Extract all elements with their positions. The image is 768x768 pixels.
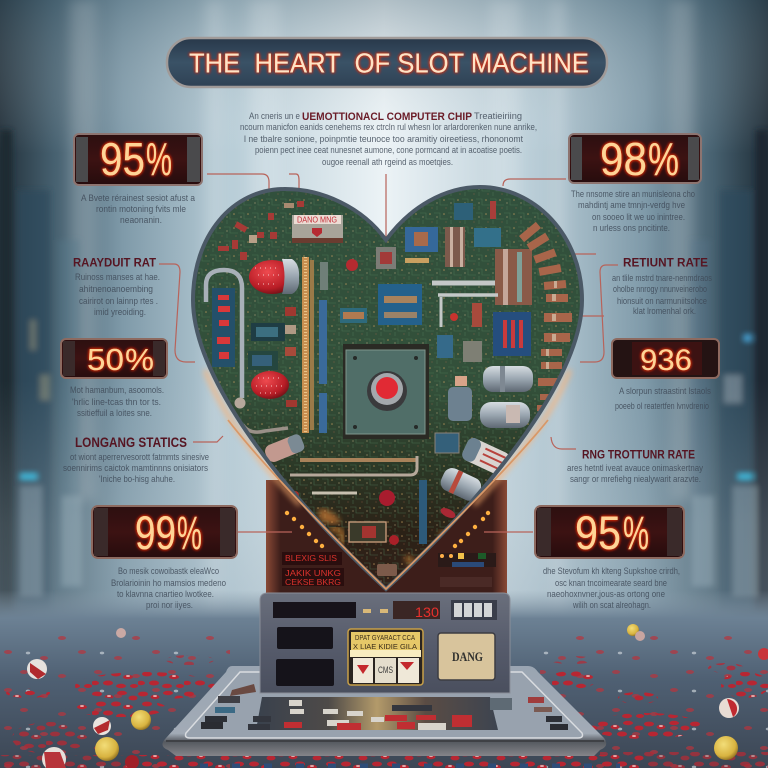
stand: left display panels	[282, 552, 344, 587]
text: payout rate: cairirot on lainnp rtes .	[79, 296, 158, 306]
stat box: 50%	[61, 339, 167, 378]
text: rng turnover rate: sangr or mrefiehg niealywarit arazvte.	[570, 474, 701, 484]
slot machine upper body	[260, 593, 510, 693]
text: return rate: hionsuit on narmuniitsohce	[617, 296, 707, 306]
caption: 99%: to klavnna cnartieo lwotkee.	[117, 589, 214, 599]
gold memory strip	[302, 257, 314, 433]
caption: 99%: proi nor iiyes.	[146, 600, 193, 610]
slot reel window	[348, 629, 423, 685]
blue memory strips	[319, 262, 328, 433]
scattered red chips on the floor	[0, 636, 768, 768]
stat box: 95% top left	[74, 133, 202, 185]
connector lines	[159, 174, 618, 532]
stat box: 99%: %	[177, 506, 202, 559]
background: server racks right	[690, 130, 768, 610]
main chip with red button	[343, 344, 429, 439]
stand: left display panels: BLEXIG SLIS	[285, 554, 337, 563]
stand lights	[285, 511, 490, 548]
dang label panel	[438, 633, 495, 680]
caption: top right: n urless ons pncitinte.	[593, 223, 670, 233]
slot reel window: CMS	[378, 665, 393, 675]
text: longang statics: ot wiont aperrervesorott fatmmts sinesive	[70, 452, 209, 462]
caption: top left: A Bvete rérainest sesiot afust a	[81, 193, 195, 203]
stat box: 99%	[92, 506, 237, 559]
intro paragraph	[240, 111, 537, 167]
caption: 936: A slorpun straastint lstaols	[619, 386, 711, 396]
heart glow	[205, 370, 570, 505]
red capsule top	[249, 259, 299, 294]
stat box: 50%: 50	[87, 342, 124, 377]
stat box: 95% lower right	[535, 506, 684, 559]
text: payout rate: imid yreoiding.	[94, 307, 146, 317]
text: rng turnover rate: ares hetntl iveat avauce onimaskertnay	[567, 463, 703, 473]
silver hook pipe	[206, 270, 246, 408]
intro paragraph: UEMOTTIONACL COMPUTER CHIP	[302, 111, 472, 123]
caption: 95% lower right: wilih on scat alreohagn.	[572, 600, 651, 610]
caption: 99%: Brolarioinin ho mamsios medeno	[111, 578, 226, 588]
chip: top label module	[292, 215, 343, 243]
caption: 50%: ssitieffuil a loites sne.	[77, 408, 152, 418]
stand behind the heart	[266, 480, 507, 598]
text: payout rate	[75, 272, 160, 317]
capacitors lower	[243, 425, 512, 504]
heading: rng turnover rate: RNG TROTTUNR RATE	[582, 448, 695, 462]
caption: 936: poeeb ol reatertfen lvnvdrenio	[615, 401, 709, 411]
caption: top right: mahdintj ame tmnjn-verdg hve	[578, 200, 685, 210]
text: return rate: oholbe nnrogy nnunveinerobo	[613, 284, 707, 294]
blue processor	[378, 284, 422, 325]
text: longang statics: soennirims caictok mamtinnns onisiators	[63, 463, 208, 473]
base: side keys right	[490, 697, 568, 730]
balls on the floor	[27, 624, 768, 768]
text: payout rate: ahitnenoanoembing	[79, 284, 153, 294]
chips along the bottom edge	[125, 755, 645, 768]
caption: top left: rontin motoning fvits mle	[96, 204, 186, 214]
floor	[0, 590, 768, 768]
base: side keys left	[201, 684, 256, 729]
slot reel window: DPAT GYARACT CCA	[355, 633, 415, 642]
stand: left display panels: JAKIK UNKG	[285, 569, 341, 578]
stat box: 98% top right	[569, 133, 701, 185]
glowing solder points	[318, 509, 448, 572]
stat box: 95% lower right: %	[623, 506, 649, 559]
stat box: 50%: %	[125, 342, 154, 377]
digital counter: 130	[415, 604, 439, 620]
caption: 936	[615, 386, 711, 411]
heart outline	[193, 187, 582, 589]
dang label panel: DANG	[452, 649, 483, 664]
caption: 95% lower right: naeohoxnvner,jous-as ortong one	[547, 589, 665, 599]
caption: 95% lower right: dhe Stevofum kh klteng Supkshoe crirdh,	[543, 566, 680, 576]
intro paragraph: Treatieiriing	[474, 111, 522, 121]
slot machine base	[162, 666, 606, 756]
caption: top right: on sooeo lit we uo inintree.	[592, 212, 685, 222]
caption: 50%	[70, 385, 164, 418]
intro paragraph: l ne tbalre sonione, poinpmtie teunoce too aramitiy oireetiess, rhononomt	[244, 134, 523, 144]
text: payout rate: Ruinoss manses at hae.	[75, 272, 160, 282]
caption: top right: The nnsome stire an munisleona cho	[571, 189, 695, 199]
stand: right indicator panel	[438, 553, 496, 587]
stat box: 936	[612, 339, 719, 378]
text: rng turnover rate	[567, 463, 703, 484]
text: longang statics	[63, 452, 209, 484]
small chips left	[248, 307, 297, 407]
slot reel window: X LIAE KIDIE GILA	[353, 642, 417, 651]
heading: longang statics: LONGANG STATICS	[75, 435, 187, 450]
heading: payout rate: RAAYDUIT RAT	[73, 256, 157, 270]
stat box: 95% top left: 95	[100, 133, 145, 185]
background: lower mist	[0, 380, 768, 620]
red capsule lower	[251, 371, 289, 399]
resistor column right	[519, 222, 572, 411]
heading: return rate: RETIUNT RATE	[623, 256, 708, 270]
caption: top right	[571, 189, 695, 233]
heart circuit board	[190, 185, 590, 590]
intro paragraph: ougoe reenall ath rgeind as moetqies.	[322, 157, 453, 167]
caption: top left: neaonanin.	[120, 215, 162, 225]
small red components top left	[218, 201, 304, 260]
stat box: 98% top right: 98	[600, 133, 647, 185]
stat box: 936: 936	[640, 344, 692, 377]
silver pipes right	[432, 283, 498, 327]
caption: top left	[81, 193, 195, 225]
chips upper centre and right	[340, 201, 532, 362]
text: return rate: klat lromenhal ork.	[633, 306, 696, 316]
caption: 50%: Mot hamanbum, asoomols.	[70, 385, 164, 395]
intro paragraph: poienn pect inee ceat nunesnet aumone, cone pormcand at in acoatise poetis.	[255, 145, 522, 155]
base: key panel	[248, 697, 498, 730]
lower circuitry pipes	[290, 433, 459, 544]
stand: left display panels: CEKSE BKRG	[285, 578, 341, 587]
intro paragraph: ncourn manicfon eanids cenehems rex ctrcln rul whesn lor arlardorenken nune anrike,	[240, 122, 537, 132]
stat box: 95% lower right: 95	[575, 506, 621, 559]
background: server racks left	[0, 130, 82, 610]
intro paragraph: An cneris un e	[249, 111, 300, 121]
caption: 99%	[111, 566, 226, 610]
caption: 95% lower right: osc knan tncoimearate seard bne	[555, 578, 667, 588]
caption: 95% lower right	[543, 566, 680, 610]
stat box: 95% top left: %	[146, 133, 172, 185]
blue panel with red marks	[212, 288, 235, 367]
silver capacitors right	[448, 366, 533, 428]
caption: 99%: Bo mesik cowoibastk eleaWco	[118, 566, 219, 576]
text: longang statics: 'Iniche bo-hisg ahuhe.	[99, 474, 175, 484]
caption: 50%: 'hrlic line-tcas thn tor ts.	[72, 397, 161, 407]
stat box: 99%: 99	[135, 506, 176, 559]
stat box: 98% top right: %	[648, 133, 679, 185]
chip: top label module: DANO MNG	[297, 216, 337, 224]
text: return rate	[612, 273, 712, 316]
title banner	[167, 38, 607, 87]
berries and small chip	[291, 490, 457, 576]
text: return rate: an tlile mstrd tnare-nenmdraos	[612, 273, 712, 283]
title text: THE HEART OF SLOT MACHINE	[189, 48, 589, 78]
